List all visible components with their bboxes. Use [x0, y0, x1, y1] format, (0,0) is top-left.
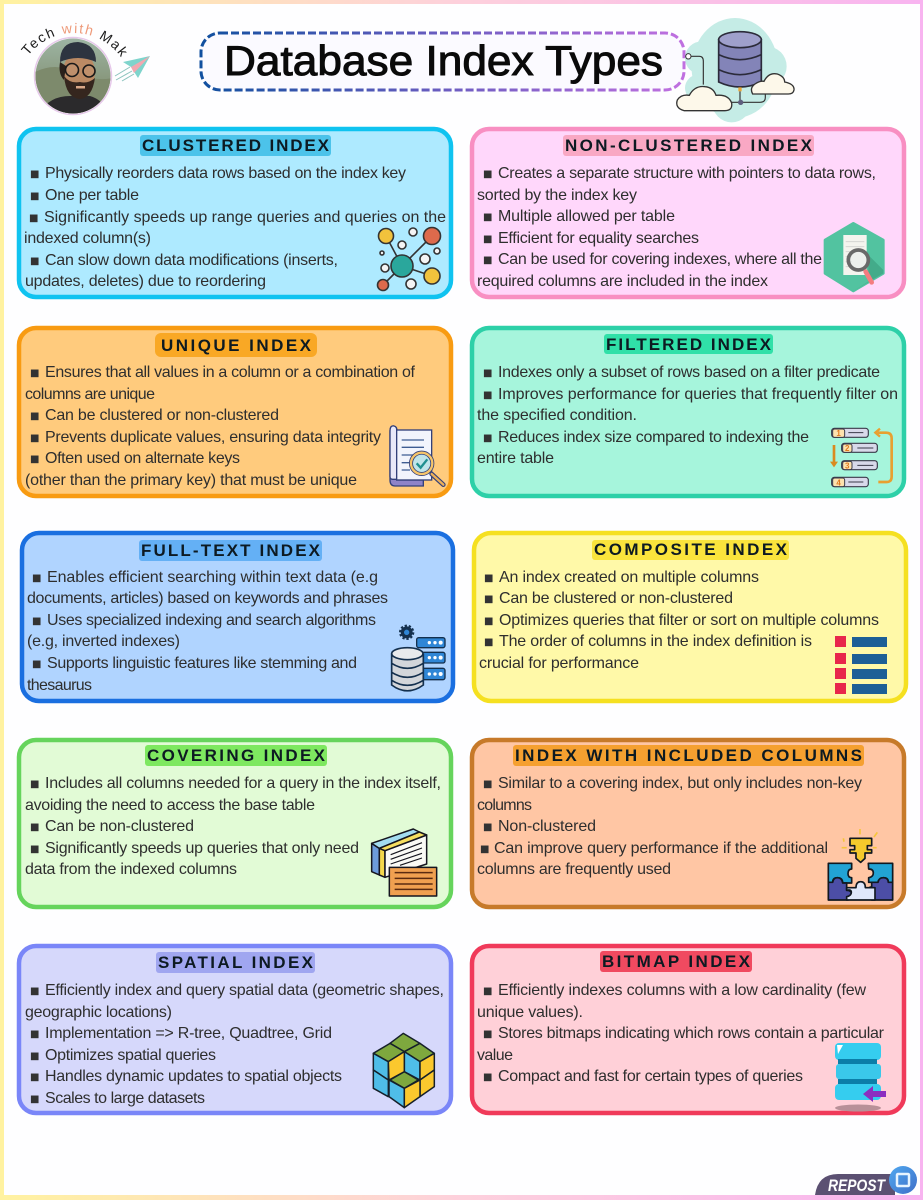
text: spatial index points: ■: [30, 1072, 39, 1083]
text: non-clustered index points: sorted by the index key: [477, 187, 637, 204]
text: non-clustered index points: Efficient for equality searches: [498, 230, 699, 247]
text: clustered index points: Significantly speeds up range queries and queries on the: [44, 209, 446, 226]
text: covering index points: avoiding the need to access the base table: [25, 797, 315, 814]
text: non-clustered index points: ■: [483, 255, 492, 266]
logo: Tech with Mak: [20, 22, 150, 116]
heading: bitmap index: BITMAP INDEX: [602, 952, 751, 971]
text: unique index points: columns are unique: [25, 386, 155, 403]
text: non-clustered index points: ■: [483, 212, 492, 223]
text: non-clustered index points: Can be used for covering indexes, where all the: [498, 251, 822, 268]
text: included columns points: Can improve query performance if the additional: [494, 840, 828, 857]
text: clustered index points: Can slow down data modifications (inserts,: [45, 252, 338, 269]
text: spatial index points: geographic locations): [25, 1004, 172, 1021]
icon: numbered steps with arrows: 3: [845, 461, 850, 470]
panel: filtered index: [472, 328, 904, 496]
icon: numbered steps with arrows: 1: [836, 429, 841, 438]
text: spatial index points: [25, 982, 444, 1107]
icon: document in hexagon with magnifier: [825, 223, 883, 291]
text: composite index points: ■: [484, 573, 493, 584]
text: filtered index points: [477, 364, 898, 467]
text: full-text index points: Enables efficient searching within text data (e.g: [47, 569, 378, 586]
text: unique index points: Prevents duplicate values, ensuring data integrity: [45, 429, 381, 446]
text: bitmap index points: value: [477, 1047, 513, 1064]
text: full-text index points: ■: [32, 659, 41, 670]
text: full-text index points: [27, 569, 388, 694]
text: unique index points: (other than the primary key) that must be unique: [25, 472, 357, 489]
text: composite index points: [479, 569, 879, 672]
text: spatial index points: Scales to large datasets: [45, 1090, 205, 1107]
icon: stacked cubes: [373, 1033, 434, 1108]
text: included columns points: Non-clustered: [498, 818, 596, 835]
text: composite index points: Optimizes queries that filter or sort on multiple columns: [499, 612, 879, 629]
text: full-text index points: documents, articles) based on keywords and phrases: [27, 590, 388, 607]
panel: bitmap index: [472, 946, 904, 1113]
heading: covering index: COVERING INDEX: [147, 746, 326, 765]
text: bitmap index points: Efficiently indexes columns with a low cardinality (few: [498, 982, 866, 999]
text: non-clustered index points: ■: [483, 234, 492, 245]
text: clustered index points: ■: [30, 169, 39, 180]
heading: unique index: UNIQUE INDEX: [161, 336, 312, 355]
icon: list with red squares and blue bars: [835, 636, 887, 694]
text: spatial index points: ■: [30, 1029, 39, 1040]
icon: database with clouds: [677, 18, 794, 122]
text: non-clustered index points: ■: [483, 169, 492, 180]
text: full-text index points: ■: [32, 616, 41, 627]
heading: composite index: COMPOSITE INDEX: [594, 540, 788, 559]
text: composite index points: Can be clustered or non-clustered: [499, 590, 733, 607]
text: bitmap index points: ■: [483, 986, 492, 997]
text: covering index points: ■: [30, 844, 39, 855]
text: clustered index points: One per table: [45, 187, 139, 204]
text: spatial index points: ■: [30, 1094, 39, 1105]
panel: non-clustered index: [472, 129, 904, 297]
text: spatial index points: Implementation => R-tree, Quadtree, Grid: [45, 1025, 332, 1042]
icon: numbered steps with arrows: 4: [836, 478, 841, 487]
text: composite index points: An index created on multiple columns: [499, 569, 759, 586]
icon: network nodes: [378, 228, 440, 290]
text: filtered index points: ■: [483, 390, 492, 401]
text: bitmap index points: ■: [483, 1072, 492, 1083]
text: included columns points: columns: [477, 797, 532, 814]
icon: stacked index cards: [372, 829, 437, 896]
text: unique index points: ■: [30, 454, 39, 465]
text: full-text index points: ■: [32, 573, 41, 584]
text: spatial index points: Optimizes spatial queries: [45, 1047, 216, 1064]
title banner: Database Index Types: [224, 37, 663, 84]
text: clustered index points: ■: [29, 213, 38, 224]
icon: numbered steps with arrows: [830, 428, 892, 487]
heading: index with included columns: INDEX WITH INCLUDED COLUMNS: [515, 746, 862, 765]
text: composite index points: ■: [484, 637, 493, 648]
text: covering index points: Can be non-clustered: [45, 818, 194, 835]
text: included columns points: ■: [483, 779, 492, 790]
text: bitmap index points: Compact and fast for certain types of queries: [498, 1068, 803, 1085]
icon: cyan database with purple arrow: [835, 1043, 886, 1112]
text: covering index points: ■: [30, 779, 39, 790]
badge: repost: REPOST: [828, 1176, 886, 1195]
text: bitmap index points: [477, 982, 885, 1085]
text: included columns points: ■: [483, 822, 492, 833]
text: spatial index points: ■: [30, 1051, 39, 1062]
text: clustered index points: ■: [30, 191, 39, 202]
text: unique index points: ■: [30, 368, 39, 379]
text: included columns points: ■: [480, 844, 489, 855]
text: composite index points: The order of columns in the index definition is: [499, 633, 812, 650]
text: filtered index points: entire table: [477, 450, 554, 467]
icon: database with servers and gear: [392, 626, 445, 691]
text: unique index points: Often used on alternate keys: [45, 450, 240, 467]
icon: puzzle pieces: [828, 829, 893, 900]
text: covering index points: [25, 775, 441, 878]
text: full-text index points: Supports linguistic features like stemming and: [47, 655, 357, 672]
text: filtered index points: the specified condition.: [477, 407, 637, 424]
panel: full-text index: [22, 533, 453, 701]
heading: full-text index: FULL-TEXT INDEX: [141, 541, 321, 560]
text: composite index points: ■: [484, 594, 493, 605]
panel: composite index: [474, 533, 906, 701]
text: covering index points: Significantly speeds up queries that only need: [45, 840, 359, 857]
text: covering index points: ■: [30, 822, 39, 833]
text: unique index points: Ensures that all values in a column or a combination of: [45, 364, 416, 381]
text: bitmap index points: unique values).: [477, 1004, 583, 1021]
text: filtered index points: Improves performance for queries that frequently filter on: [498, 386, 898, 403]
text: spatial index points: Efficiently index and query spatial data (geometric shapes,: [45, 982, 444, 999]
text: non-clustered index points: [477, 165, 876, 290]
text: included columns points: columns are frequently used: [477, 861, 671, 878]
text: clustered index points: ■: [30, 256, 39, 267]
text: full-text index points: (e.g, inverted indexes): [27, 633, 180, 650]
text: filtered index points: ■: [483, 368, 492, 379]
text: composite index points: crucial for performance: [479, 655, 639, 672]
text: included columns points: [477, 775, 862, 878]
text: non-clustered index points: Multiple allowed per table: [498, 208, 675, 225]
heading: clustered index: CLUSTERED INDEX: [142, 136, 330, 155]
text: included columns points: Similar to a covering index, but only includes non-key: [498, 775, 862, 792]
panel: index with included columns: [472, 740, 904, 907]
text: full-text index points: Uses specialized indexing and search algorithms: [47, 612, 376, 629]
text: non-clustered index points: required columns are included in the index: [477, 273, 768, 290]
text: filtered index points: Reduces index size compared to indexing the: [498, 429, 809, 446]
text: clustered index points: [24, 165, 446, 290]
heading: filtered index: FILTERED INDEX: [606, 335, 772, 354]
badge: repost: [815, 1166, 917, 1195]
heading: non-clustered index: NON-CLUSTERED INDEX: [565, 136, 813, 155]
text: covering index points: Includes all columns needed for a query in the index itself,: [45, 775, 441, 792]
text: bitmap index points: ■: [483, 1029, 492, 1040]
icon: document with checkmark magnifier: [390, 426, 443, 486]
text: composite index points: ■: [484, 616, 493, 627]
text: spatial index points: Handles dynamic updates to spatial objects: [45, 1068, 342, 1085]
icon: numbered steps with arrows: 2: [845, 444, 850, 453]
text: covering index points: data from the indexed columns: [25, 861, 237, 878]
text: clustered index points: updates, deletes) due to reordering: [25, 273, 266, 290]
text: full-text index points: thesaurus: [27, 677, 92, 694]
panel: covering index: [19, 740, 451, 907]
text: spatial index points: ■: [30, 986, 39, 997]
text: unique index points: Can be clustered or non-clustered: [45, 407, 279, 424]
heading: spatial index: SPATIAL INDEX: [158, 953, 314, 972]
text: non-clustered index points: Creates a separate structure with pointers to data rows,: [498, 165, 876, 182]
text: clustered index points: indexed column(s): [24, 230, 151, 247]
text: filtered index points: Indexes only a subset of rows based on a filter predicate: [498, 364, 880, 381]
text: unique index points: ■: [30, 411, 39, 422]
text: clustered index points: Physically reorders data rows based on the index key: [45, 165, 406, 182]
text: unique index points: [25, 364, 416, 489]
text: unique index points: ■: [30, 433, 39, 444]
panel: clustered index: [19, 129, 451, 297]
panel: spatial index: [19, 946, 451, 1113]
text: filtered index points: ■: [483, 433, 492, 444]
panel: unique index: [19, 328, 451, 496]
text: bitmap index points: Stores bitmaps indicating which rows contain a particular: [498, 1025, 885, 1042]
logo: Tech with Mak: Tech with Mak: [20, 22, 127, 58]
